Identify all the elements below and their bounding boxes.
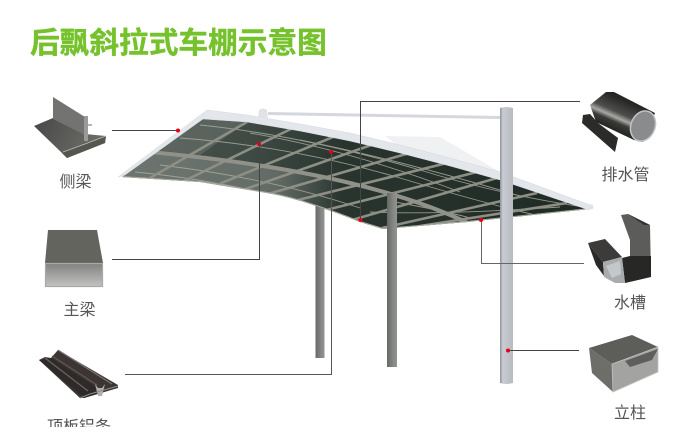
label: main beam: 主梁 bbox=[63, 301, 96, 319]
icon: main beam box bbox=[45, 230, 103, 286]
icon: gutter bbox=[588, 214, 651, 283]
icon: drain pipe bbox=[582, 92, 660, 152]
icon: aluminium strip bbox=[39, 350, 118, 398]
leader lines and markers bbox=[112, 102, 584, 374]
title: 后飘斜拉式车棚示意图 bbox=[30, 27, 327, 60]
part: side beam bbox=[34, 97, 106, 191]
leader: column bbox=[508, 350, 579, 352]
faint back fin of roof bbox=[385, 136, 590, 206]
leader: side beam bbox=[112, 130, 178, 132]
beam end cap bbox=[588, 204, 594, 210]
roof bbox=[118, 110, 593, 229]
label: side beam: 侧梁 bbox=[59, 173, 92, 191]
carport structure bbox=[118, 107, 594, 384]
leader: top plate strip bbox=[125, 152, 332, 374]
rear support pillar middle bbox=[387, 193, 397, 367]
label: top plate aluminium strip: 顶板铝条 bbox=[47, 418, 111, 436]
leader: gutter bbox=[482, 220, 584, 264]
part: drain pipe bbox=[582, 92, 660, 184]
label: gutter: 水槽 bbox=[614, 294, 646, 312]
main cross beam bbox=[150, 152, 468, 223]
icon: side beam profile bbox=[34, 97, 106, 158]
roof framing grid bbox=[118, 119, 590, 229]
part: main beam bbox=[45, 230, 103, 319]
rear support pillar left bbox=[316, 205, 324, 358]
roof glass bbox=[122, 119, 590, 229]
tie rod bbox=[268, 112, 501, 119]
part: column bbox=[589, 335, 658, 422]
lighter reflection on left panels bbox=[124, 154, 329, 208]
white side beam frame bbox=[118, 110, 593, 210]
label: drain pipe: 排水管 bbox=[601, 166, 650, 184]
icon: column box bbox=[589, 335, 658, 392]
part: gutter bbox=[588, 214, 651, 312]
lug on roof bbox=[258, 108, 268, 118]
main pillar bbox=[500, 107, 513, 384]
page bottom mask bbox=[0, 427, 700, 439]
leader: drain pipe bbox=[360, 102, 580, 220]
label: column: 立柱 bbox=[614, 404, 646, 422]
part: top plate aluminium strip bbox=[0, 350, 700, 439]
drainage edge bbox=[122, 177, 590, 229]
red markers bbox=[176, 128, 510, 352]
leader: main beam bbox=[112, 144, 260, 260]
